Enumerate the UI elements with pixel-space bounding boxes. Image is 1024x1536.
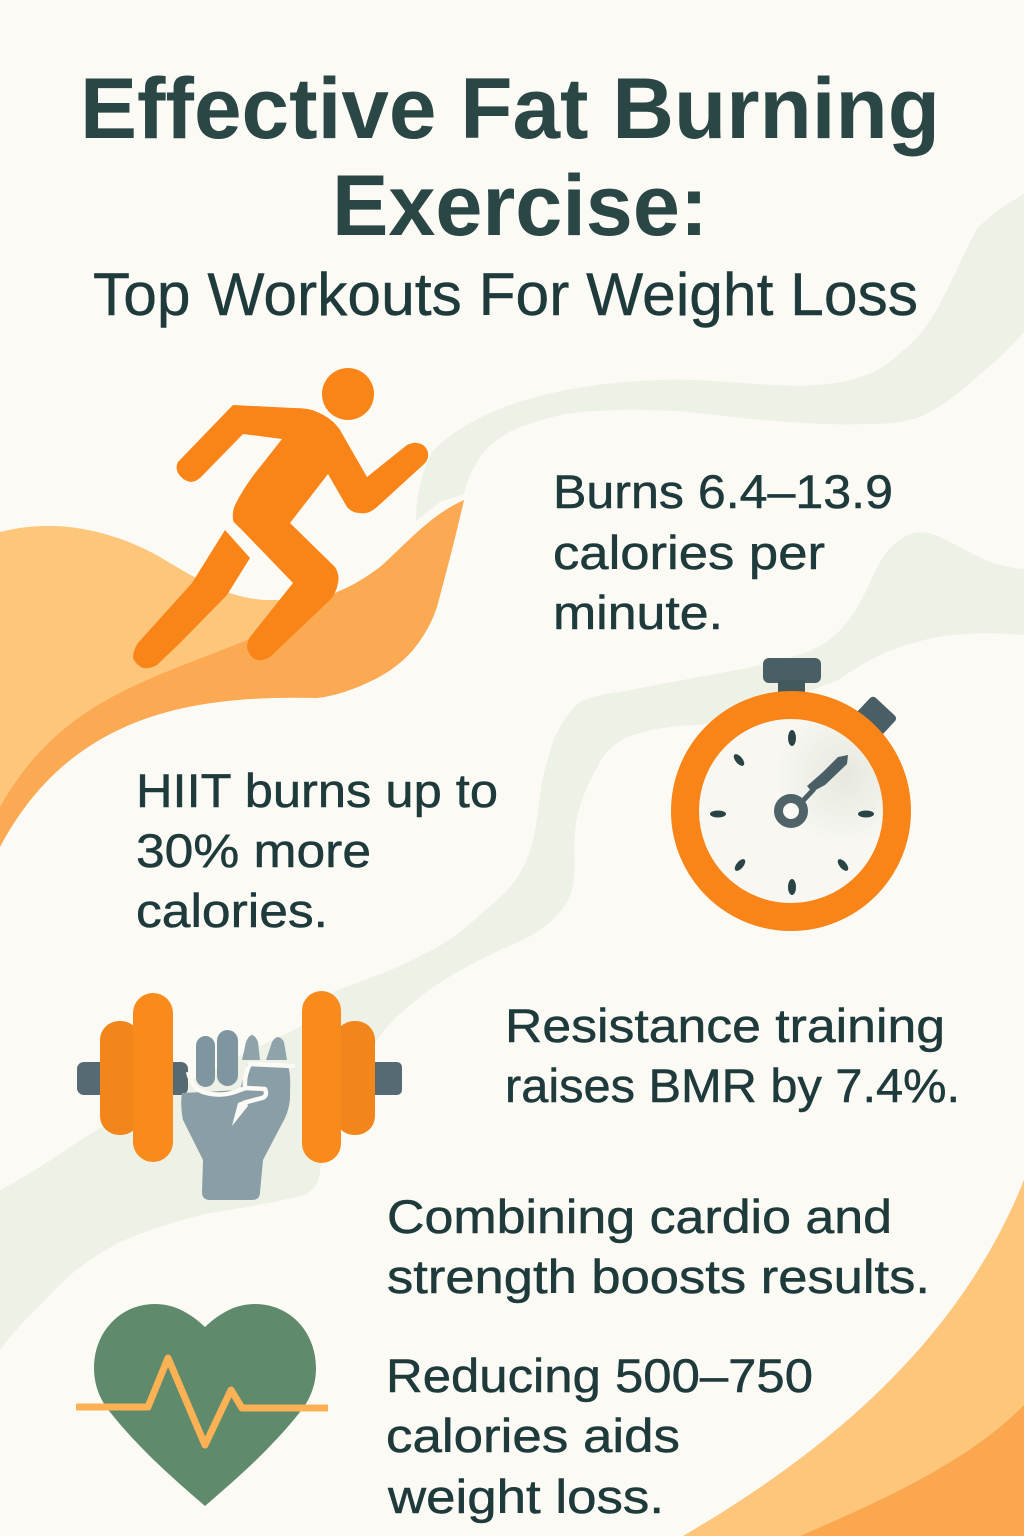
title: Exercise: (332, 158, 708, 254)
text: reducing (386, 1349, 813, 1523)
background wave: orange bottom right (800, 1405, 1024, 1536)
subtitle: Top Workouts For Weight Loss (93, 261, 918, 328)
text: running calories: minute. (553, 586, 723, 639)
text: resistance training (505, 999, 960, 1112)
text: combining: strength boosts results. (387, 1250, 930, 1303)
text: reducing: calories aids (386, 1409, 680, 1462)
text: HIIT: calories. (136, 884, 328, 937)
text: combining: Combining cardio and (387, 1190, 892, 1243)
background wave: lower green band (0, 532, 1024, 1350)
text: running calories: calories per (553, 526, 825, 579)
text: resistance training: raises BMR by 7.4%. (505, 1059, 960, 1112)
text: reducing: weight loss. (387, 1470, 664, 1523)
text: resistance training: Resistance training (505, 999, 945, 1052)
text: reducing: Reducing 500–750 (386, 1349, 813, 1402)
text: HIIT (136, 764, 498, 937)
text: combining (387, 1190, 930, 1303)
title (80, 61, 940, 254)
background wave: light orange left (0, 526, 340, 830)
background wave: orange left (0, 500, 464, 847)
icon: runner (133, 368, 428, 668)
title: Effective Fat Burning (80, 61, 940, 157)
text: HIIT: 30% more (136, 824, 371, 877)
icon: stopwatch (685, 658, 898, 917)
text: running calories: Burns 6.4–13.9 (553, 465, 893, 518)
icon: dumbbell and fist (77, 991, 402, 1200)
text: HIIT: HIIT burns up to (136, 764, 498, 817)
text: running calories (553, 465, 893, 639)
background wave: light orange bottom right (683, 1180, 1024, 1536)
icon: heart with pulse (76, 1304, 328, 1506)
background wave: upper green band (416, 194, 1024, 521)
